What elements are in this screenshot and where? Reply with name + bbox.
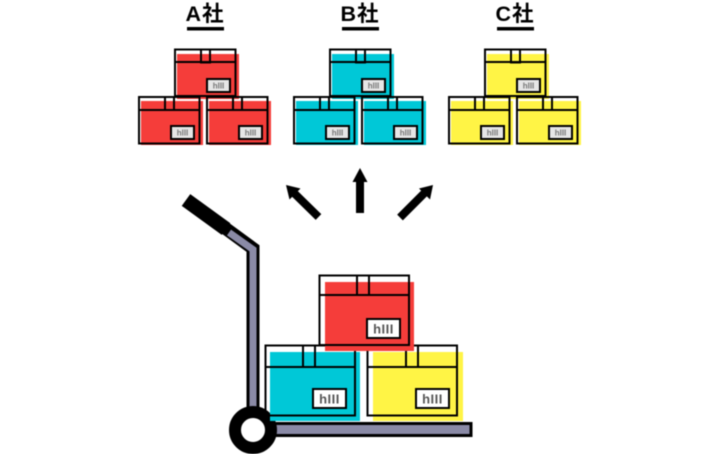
wheel — [235, 412, 271, 448]
box: B left — [294, 97, 358, 145]
arrow: up — [352, 168, 368, 213]
box: A left: hIII — [177, 128, 188, 138]
group: company B — [294, 2, 426, 145]
base plate — [262, 424, 471, 436]
box: A right: hIII — [245, 128, 256, 138]
box: A top — [175, 50, 239, 99]
box: C left — [449, 97, 513, 145]
heading: B社: B社 — [340, 2, 380, 26]
box: B right: hIII — [400, 128, 411, 138]
heading: A社: A社 — [185, 2, 225, 26]
stem — [225, 228, 253, 415]
box: C left: hIII — [487, 128, 498, 138]
box: A left — [139, 97, 203, 145]
handle — [186, 200, 226, 229]
box: B left: hIII — [332, 128, 343, 138]
box: C top: hIII — [523, 82, 534, 90]
box: B top: hIII — [368, 82, 379, 90]
box: B right — [362, 97, 426, 145]
box: A right — [207, 97, 271, 145]
box: large cyan: hIII — [319, 392, 340, 406]
group: company A — [139, 2, 271, 145]
box: large yellow: hIII — [422, 392, 443, 406]
box: large yellow — [368, 346, 463, 421]
box: large red — [320, 276, 414, 351]
group: company C — [449, 2, 581, 145]
hand truck — [186, 200, 471, 448]
box: C top — [485, 50, 549, 99]
box: B top — [330, 50, 394, 99]
box: large cyan — [266, 346, 360, 421]
heading: C社: C社 — [495, 2, 535, 26]
box: large red: hIII — [373, 322, 394, 336]
arrow: left — [286, 185, 318, 217]
arrow: right — [400, 185, 433, 218]
box: A top: hIII — [213, 82, 224, 90]
box: C right: hIII — [555, 128, 566, 138]
box: C right — [517, 97, 581, 145]
